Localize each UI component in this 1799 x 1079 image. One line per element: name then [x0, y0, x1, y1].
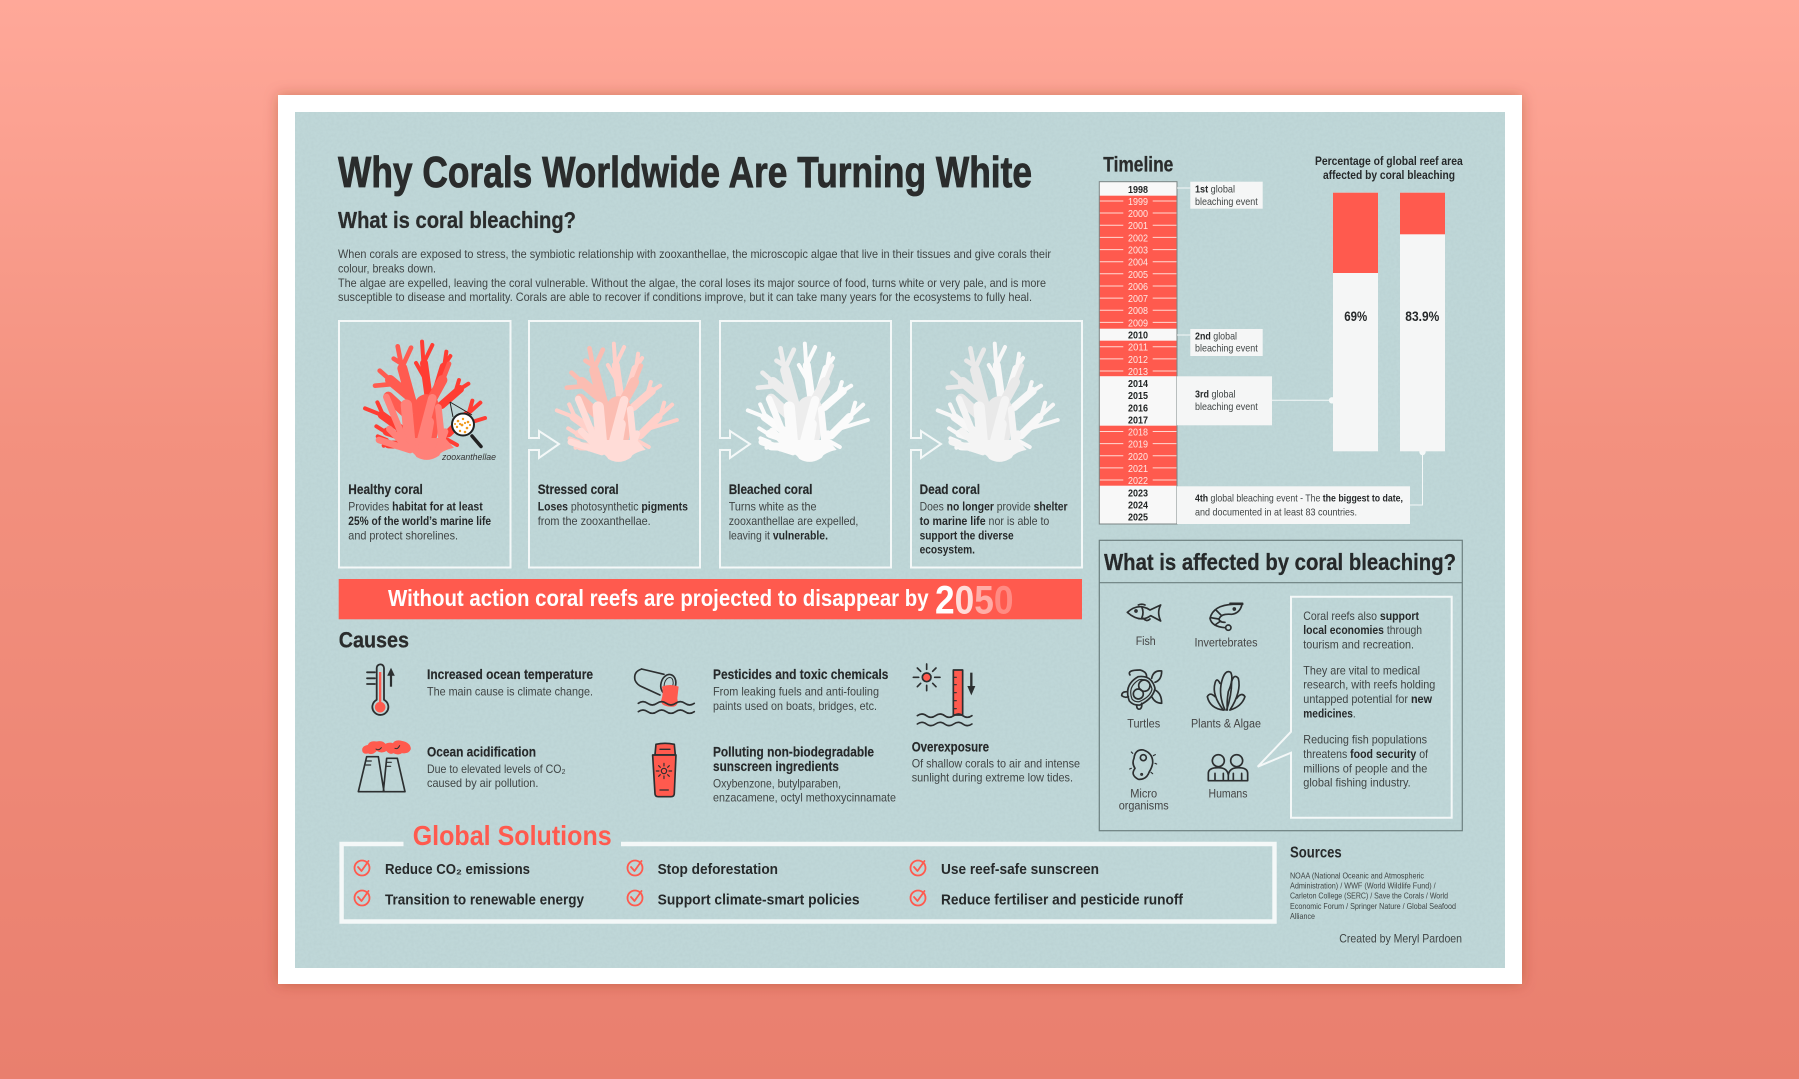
label: 1st bleaching event: bleaching event: [1195, 196, 1258, 208]
label: micro organisms: organisms: [1119, 801, 1169, 813]
label: plants and algae: Plants & Algae: [1191, 719, 1261, 731]
callout: economic importance: global fishing industry.: [1303, 776, 1411, 790]
panel: stressed coral: [529, 321, 700, 568]
text: increased ocean temperature: Increased ocean temperature: [427, 667, 593, 682]
callout: economic importance: local economies through: [1303, 623, 1422, 637]
bar chart: 69 percent: [1333, 193, 1378, 451]
label: 2nd bleaching event: 2nd global: [1195, 330, 1237, 342]
chart: timeline years: 2015: [1128, 390, 1148, 402]
chart title: percentage of global reef area: affected by coral bleaching: [1323, 168, 1455, 182]
text: healthy coral description: Healthy coral: [348, 482, 423, 497]
credit: Created by Meryl Pardoen: [1339, 932, 1462, 946]
text: polluting sunscreen: Oxybenzone, butylparaben,: [713, 776, 841, 790]
bar chart: 83.9 percent: [1400, 193, 1445, 451]
text: bleached coral description: Turns white as the: [729, 500, 817, 514]
text: pesticides and toxic chemicals: paints used on boats, bridges, etc.: [713, 699, 877, 713]
chart: timeline years: 2010: [1128, 330, 1148, 342]
chart: timeline years: 2011: [1128, 342, 1148, 354]
icon: healthy coral illustration: [365, 342, 485, 460]
text: increased ocean temperature: The main cause is climate change.: [427, 685, 593, 699]
heading: sources: Sources: [1290, 844, 1342, 861]
label: 3rd bleaching event: 3rd global: [1195, 389, 1236, 401]
solutions list: Reduce fertiliser and pesticide runoff: [941, 892, 1183, 908]
label: 4th bleaching event: [1177, 449, 1426, 524]
heading: what is coral bleaching: What is coral bleaching?: [338, 207, 576, 233]
text: bleached coral description: [729, 482, 858, 542]
text: stressed coral description: Stressed coral: [538, 482, 619, 497]
text: healthy coral description: [348, 482, 491, 542]
text: sources list: NOAA (National Oceanic and Atmospheric: [1290, 871, 1424, 880]
heading: timeline: Timeline: [1103, 154, 1173, 177]
intro text block: [338, 247, 1051, 304]
text: ocean acidification: Due to elevated levels of CO₂: [427, 762, 566, 776]
heading: global solutions: Global Solutions: [413, 820, 612, 851]
label: invertebrates: Invertebrates: [1194, 638, 1258, 650]
panel: global solutions: [342, 820, 1275, 922]
icon: sun and falling water level: [913, 664, 975, 726]
panel: bleached coral: [720, 321, 891, 568]
text: sources list: Alliance: [1290, 912, 1315, 921]
chart: timeline years: 2005: [1128, 269, 1148, 281]
intro text block: colour, breaks down.: [338, 262, 436, 276]
chart: timeline years: 2013: [1128, 366, 1148, 378]
solutions list: Use reef-safe sunscreen: [941, 862, 1099, 878]
chart: timeline years: 2009: [1128, 317, 1148, 329]
callout: economic importance: [1258, 597, 1452, 818]
callout: economic importance: Coral reefs also support: [1303, 609, 1419, 623]
icon: plants and algae: [1207, 672, 1245, 710]
icon: fish: [1127, 604, 1161, 621]
callout: economic importance: Reducing fish populations: [1303, 733, 1427, 747]
intro text block: When corals are exposed to stress, the symbiotic relationship with zooxanthellae, the microscopic algae that live in their tissues and give corals their: [338, 247, 1051, 261]
chart: timeline years: 2000: [1128, 208, 1148, 220]
label: 2nd bleaching event: bleaching event: [1195, 342, 1258, 354]
text: polluting sunscreen: enzacamene, octyl methoxycinnamate: [713, 791, 896, 805]
text: polluting sunscreen: [713, 745, 896, 805]
chart: timeline years: 2020: [1128, 451, 1148, 463]
check icons: [354, 860, 926, 906]
text: ocean acidification: [427, 745, 566, 790]
text: dead coral description: Does no longer provide shelter: [920, 500, 1068, 514]
text: overexposure: Of shallow corals to air and intense: [912, 756, 1080, 770]
chart: timeline years: 2008: [1128, 305, 1148, 317]
cause: pesticides and toxic chemicals: [635, 667, 888, 713]
text: stressed coral description: from the zooxanthellae.: [538, 514, 651, 528]
label: 2nd bleaching event: [1177, 329, 1263, 356]
text: sources list: Administration) / WWF (World Wildlife Fund) /: [1290, 881, 1436, 890]
solutions list: Transition to renewable energy: [385, 892, 584, 908]
chart: timeline years: 2021: [1128, 463, 1148, 475]
callout: economic importance: threatens food security of: [1303, 747, 1429, 761]
label: humans: Humans: [1208, 789, 1248, 801]
text: overexposure: Overexposure: [912, 740, 989, 754]
text: bleached coral description: leaving it vulnerable.: [729, 528, 828, 542]
bar chart: 83.9 percent: 83.9%: [1405, 308, 1440, 324]
banner: disappear by 2050: Without action coral reefs are projected to disappear by: [388, 585, 929, 611]
label: 1st bleaching event: 1st global: [1195, 184, 1235, 196]
icon: microorganism: [1130, 750, 1157, 779]
icon: magnifier with zooxanthellae: [450, 402, 481, 446]
label: micro organisms: Micro: [1130, 789, 1157, 801]
cause: overexposure: [912, 664, 1080, 785]
text: overexposure: sunlight during extreme low tides.: [912, 771, 1073, 785]
label: fish: Fish: [1136, 636, 1156, 648]
text: sources list: Carleton College (SERC) / Save the Corals / World: [1290, 892, 1448, 901]
chart: timeline years: 2003: [1128, 244, 1148, 256]
panel: what is affected: [1099, 540, 1462, 831]
icon: humans: [1208, 755, 1248, 781]
text: stressed coral description: [538, 482, 688, 528]
cause: polluting sunscreen: [653, 743, 896, 805]
text: dead coral description: support the diverse: [920, 528, 1014, 542]
callout: economic importance: tourism and recreation.: [1303, 637, 1414, 651]
chart: timeline years: 2023: [1128, 487, 1148, 499]
text: dead coral description: ecosystem.: [920, 543, 975, 557]
text: healthy coral description: 25% of the world’s marine life: [348, 514, 491, 528]
chart: timeline years: 2024: [1128, 499, 1148, 511]
icon: turtle: [1122, 670, 1162, 709]
text: polluting sunscreen: Polluting non-biodegradable: [713, 745, 874, 760]
callout: economic importance: millions of people and the: [1303, 761, 1428, 775]
chart: timeline years: 2012: [1128, 354, 1148, 366]
poster white frame: [278, 95, 1522, 984]
label: turtles: Turtles: [1127, 719, 1160, 731]
panel: healthy coral: [339, 321, 510, 568]
icon: shrimp: [1210, 603, 1243, 630]
chart: timeline years: 2014: [1128, 378, 1148, 390]
icon: factory cooling towers with smoke: [358, 741, 410, 792]
cause: ocean acidification: [358, 741, 566, 792]
text: sources list: [1290, 871, 1456, 921]
bar chart: 69 percent: 69%: [1344, 308, 1368, 324]
chart: timeline years: 2017: [1128, 414, 1148, 426]
chart: timeline years: 2001: [1128, 220, 1148, 232]
banner: disappear by 2050: [339, 578, 1082, 622]
text: healthy coral description: Provides habitat for at least: [348, 500, 483, 514]
text: pesticides and toxic chemicals: Pesticides and toxic chemicals: [713, 667, 888, 682]
chart: timeline years: [1099, 182, 1177, 524]
icon: thermometer: [367, 664, 395, 715]
callout: economic importance: medicines.: [1303, 706, 1356, 720]
chart: timeline years: 1998: [1128, 184, 1148, 196]
chart title: percentage of global reef area: [1315, 154, 1463, 182]
intro text block: susceptible to disease and mortality. Corals are able to recover if conditions improve, but it can take many years for the ecosystems to fully heal.: [338, 290, 1032, 304]
icon: leaking pipe over waves: [635, 669, 694, 713]
solutions list: Stop deforestation: [658, 862, 778, 878]
label: 1st bleaching event: [1177, 182, 1263, 209]
text: dead coral description: [920, 482, 1068, 557]
chart: timeline years: 1999: [1128, 196, 1148, 208]
label: 4th bleaching event: and documented in at least 83 countries.: [1195, 507, 1357, 519]
text: increased ocean temperature: [427, 667, 593, 699]
label: 4th bleaching event: 4th global bleaching event - The the biggest to date,: [1195, 493, 1403, 505]
chart: timeline years: 2018: [1128, 427, 1148, 439]
chart: timeline years: 2025: [1128, 512, 1148, 524]
callout: economic importance: They are vital to medical: [1303, 663, 1420, 677]
solutions list: [385, 862, 1183, 908]
chart title: percentage of global reef area: Percentage of global reef area: [1315, 154, 1463, 168]
label: zooxanthellae: zooxanthellae: [441, 452, 496, 463]
chart: timeline years: 2019: [1128, 439, 1148, 451]
icon: dead coral illustration: [938, 344, 1058, 462]
text: pesticides and toxic chemicals: [713, 667, 888, 713]
callout: economic importance: research, with reefs holding: [1303, 678, 1435, 692]
text: bleached coral description: zooxanthellae are expelled,: [729, 514, 858, 528]
icon: stressed coral illustration: [557, 344, 677, 462]
text: polluting sunscreen: sunscreen ingredients: [713, 759, 839, 774]
label: micro organisms: [1119, 789, 1169, 813]
heading: what is affected: What is affected by coral bleaching?: [1104, 549, 1456, 575]
chart: timeline years: 2007: [1128, 293, 1148, 305]
banner: disappear by 2050: 2050: [935, 578, 1014, 622]
text: ocean acidification: Ocean acidification: [427, 745, 536, 760]
icon: sunscreen bottle: [653, 743, 676, 797]
label: 3rd bleaching event: bleaching event: [1195, 401, 1258, 413]
chart: timeline years: 2022: [1128, 475, 1148, 487]
panel: dead coral: [911, 321, 1082, 568]
text: dead coral description: Dead coral: [920, 482, 980, 497]
text: pesticides and toxic chemicals: From leaking fuels and anti-fouling: [713, 685, 879, 699]
solutions list: Support climate-smart policies: [658, 892, 860, 908]
callout: economic importance: untapped potential for new: [1303, 692, 1433, 706]
text: sources list: Economic Forum / Springer Nature / Global Seafood: [1290, 902, 1456, 911]
text: bleached coral description: Bleached coral: [729, 482, 812, 497]
intro text block: The algae are expelled, leaving the coral vulnerable. Without the algae, the coral loses its major source of food, turns white or very pale, and is more: [338, 276, 1046, 290]
text: stressed coral description: Loses photosynthetic pigments: [538, 500, 688, 514]
chart: timeline years: 2002: [1128, 232, 1148, 244]
label: 3rd bleaching event: [1177, 376, 1335, 425]
icon: bleached coral illustration: [748, 344, 868, 462]
poster teal panel: [295, 112, 1505, 968]
chart: timeline years: 2004: [1128, 257, 1148, 269]
cause: increased ocean temperature: [367, 664, 593, 715]
chart: timeline years: 2016: [1128, 402, 1148, 414]
heading: causes: Causes: [339, 627, 409, 652]
text: ocean acidification: caused by air pollution.: [427, 776, 538, 790]
chart: timeline years: 2006: [1128, 281, 1148, 293]
title: Why Corals Worldwide Are Turning White: [338, 149, 1032, 197]
text: overexposure: [912, 740, 1080, 785]
text: healthy coral description: and protect shorelines.: [348, 528, 458, 542]
text: dead coral description: to marine life nor is able to: [920, 514, 1050, 528]
solutions list: Reduce CO₂ emissions: [385, 862, 530, 878]
